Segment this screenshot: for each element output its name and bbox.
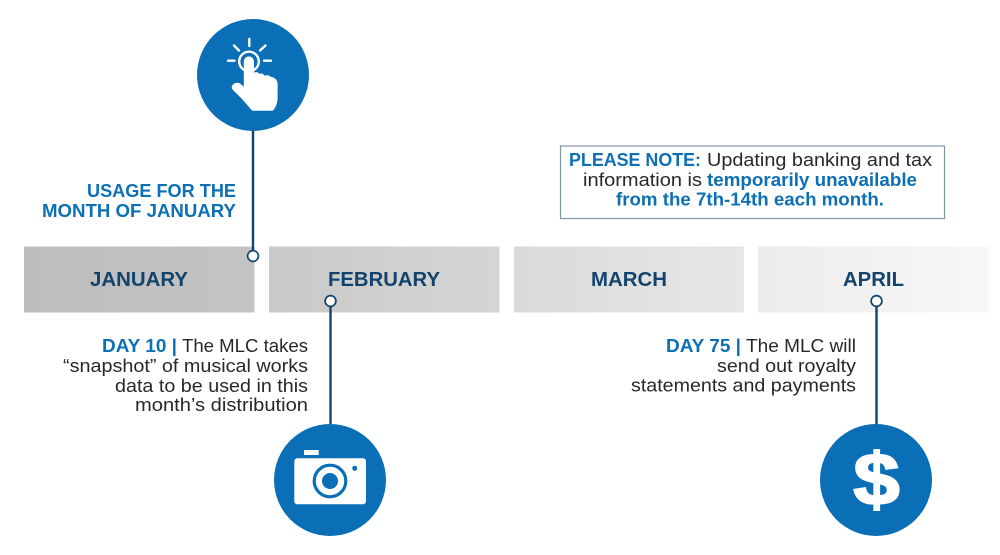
text: day 75 statements: statements and payments [631, 376, 856, 396]
connector: April marker [871, 296, 882, 428]
callout: please note: Updating banking and tax [707, 150, 932, 170]
callout: please note: from the 7th-14th each month. [616, 190, 884, 210]
icon: camera [274, 424, 386, 536]
icon: dollar sign [820, 424, 932, 536]
text: day 10 snapshot [63, 336, 308, 415]
icon: dollar sign: $ [853, 438, 900, 520]
icon: hand tapping [197, 19, 309, 131]
month bar: April: APRIL [843, 268, 904, 291]
text: day 75 statements [631, 336, 856, 396]
month bar: April [758, 246, 988, 312]
month bar: February: FEBRUARY [328, 268, 440, 291]
month bar: February [269, 246, 500, 312]
callout: please note: temporarily unavailable [707, 170, 917, 190]
text: day 75 statements: The MLC will [746, 336, 856, 356]
month bar: January [24, 246, 254, 312]
text: day 10 snapshot: The MLC takes [182, 336, 308, 356]
text: day 75 statements: DAY 75 | [666, 336, 741, 356]
month bar: March: MARCH [591, 268, 667, 291]
text: usage for the month of January: USAGE FOR THE [87, 181, 236, 201]
connector: January marker [248, 125, 258, 261]
text: usage for the month of January [42, 181, 236, 221]
text: day 10 snapshot: “snapshot” of musical works [63, 356, 308, 376]
callout: please note: information is [583, 170, 702, 190]
month bar: January: JANUARY [90, 268, 188, 291]
connector: February marker [325, 296, 336, 428]
callout: please note: PLEASE NOTE: [569, 150, 701, 170]
text: day 10 snapshot: data to be used in this [115, 376, 308, 396]
text: day 10 snapshot: month’s distribution [135, 395, 308, 415]
text: day 75 statements: send out royalty [717, 356, 856, 376]
callout: please note [560, 146, 944, 218]
text: day 10 snapshot: DAY 10 | [102, 336, 177, 356]
month bar: March [514, 246, 744, 312]
text: usage for the month of January: MONTH OF JANUARY [42, 201, 236, 221]
